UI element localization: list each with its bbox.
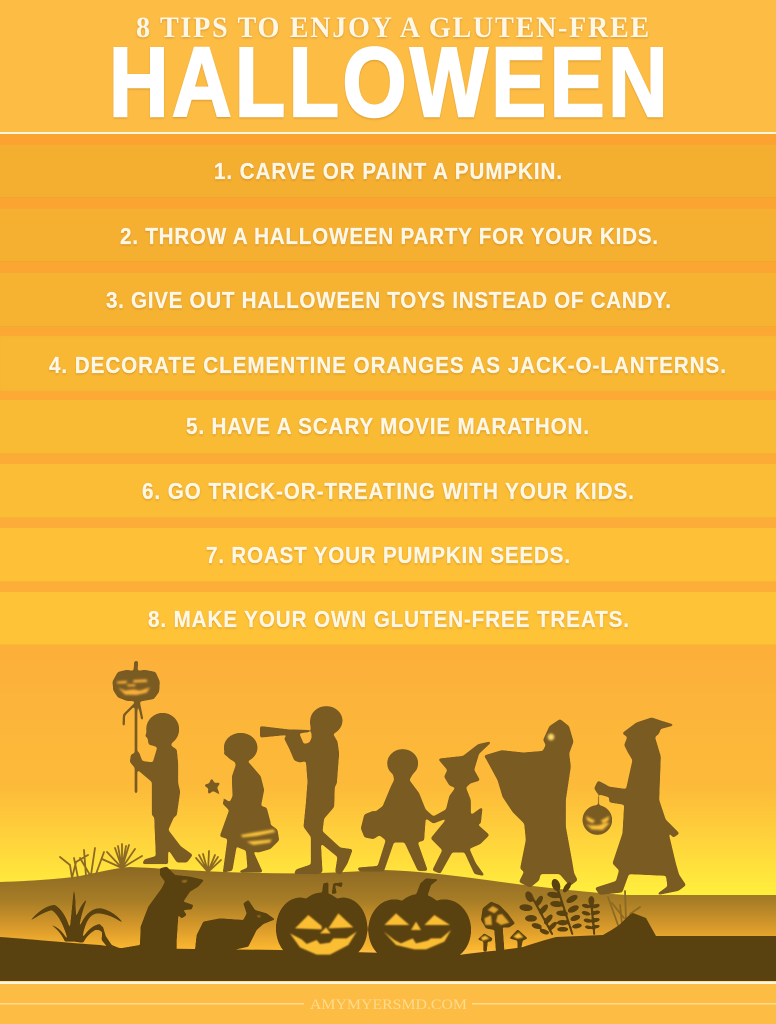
grass tuft middle xyxy=(196,851,221,872)
witch child xyxy=(432,742,490,875)
crouching mouse xyxy=(195,900,275,950)
main title: HALLOWEEN xyxy=(109,28,668,138)
tip 2: 2. THROW A HALLOWEEN PARTY FOR YOUR KIDS. xyxy=(120,223,658,249)
child with trumpet xyxy=(260,707,352,874)
pumpkin right xyxy=(368,878,471,961)
tip 8 xyxy=(0,592,776,645)
child with pumpkin on stick xyxy=(113,662,192,863)
tip 3 xyxy=(0,273,776,327)
back hill xyxy=(0,867,776,950)
ferns xyxy=(519,878,601,936)
tip 4 xyxy=(0,336,776,391)
tip 6: 6. GO TRICK-OR-TREATING WITH YOUR KIDS. xyxy=(142,478,634,504)
pumpkin left xyxy=(276,882,367,959)
tip 7: 7. ROAST YOUR PUMPKIN SEEDS. xyxy=(206,542,570,568)
list and scene background xyxy=(0,134,776,896)
tip 8: 8. MAKE YOUR OWN GLUTEN-FREE TREATS. xyxy=(148,606,629,632)
grass tuft xyxy=(102,844,142,868)
foreground ground xyxy=(0,913,776,981)
ghost child xyxy=(485,720,577,887)
subtitle: 8 TIPS TO ENJOY A GLUTEN-FREE xyxy=(136,11,649,44)
child with jack-o-lantern xyxy=(583,718,685,894)
footer xyxy=(0,981,776,1024)
header xyxy=(0,0,776,138)
plant xyxy=(28,887,124,943)
website text: AMYMYERSMD.COM xyxy=(310,997,467,1013)
background grass xyxy=(60,844,640,925)
silhouettes of children xyxy=(113,662,685,894)
tip 6 xyxy=(0,464,776,518)
tip 1: 1. CARVE OR PAINT A PUMPKIN. xyxy=(214,158,562,184)
child with wand and basket xyxy=(205,734,278,872)
grass tuft right xyxy=(608,891,640,925)
tip 5: 5. HAVE A SCARY MOVIE MARATHON. xyxy=(186,413,589,439)
mushrooms xyxy=(478,902,528,952)
tip 3: 3. GIVE OUT HALLOWEEN TOYS INSTEAD OF CANDY. xyxy=(106,287,671,313)
tip 1 xyxy=(0,145,776,198)
foreground creatures and plants xyxy=(28,867,601,961)
tip 2 xyxy=(0,209,776,262)
child with basket holding hands xyxy=(358,750,460,871)
tip 5 xyxy=(0,400,776,454)
standing mouse xyxy=(102,867,204,952)
tip 4: 4. DECORATE CLEMENTINE ORANGES AS JACK-O-LANTERNS. xyxy=(49,352,726,378)
tip 7 xyxy=(0,528,776,582)
